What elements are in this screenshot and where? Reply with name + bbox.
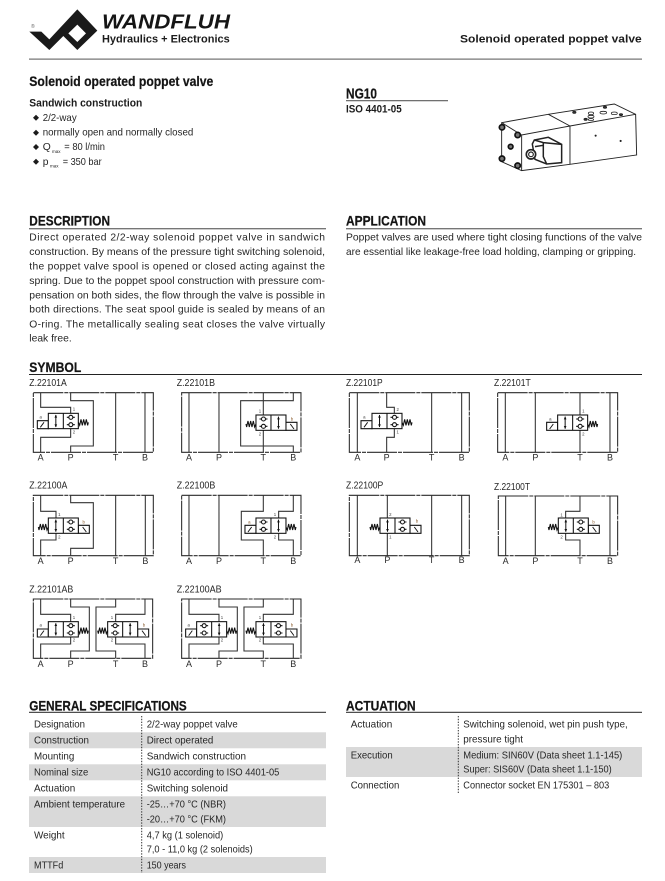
schematic: Z.22101P: T [429,453,435,463]
schematic: Z.22100T: T [577,556,583,566]
illustration: valve body [499,104,637,171]
schematic: Z.22100B: P [216,556,222,566]
schematic: Z.22101T: T [577,453,583,463]
symbol labels [29,378,531,596]
specification names [34,720,125,872]
schematic: Z.22101A: T [113,453,119,463]
symbol labels: Z.22101B [177,378,215,389]
schematic: Z.22100B: a [248,519,251,524]
schematic: Z.22101T: B [607,453,613,463]
description text [29,233,326,345]
schematic: Z.22100AB: B [290,659,296,669]
schematic: Z.22101T: A [502,453,508,463]
schematic: Z.22101P: a [363,415,366,420]
schematic: Z.22101B: 1 [259,409,262,414]
schematic: Z.22100A: B [142,556,148,566]
actuation names: Execution [351,750,393,761]
description text: Direct operated 2/2-way solenoid poppet valve in sandwich [29,233,325,244]
schematic: Z.22101A: B [142,453,148,463]
feature: flow rate: Q [43,142,51,153]
symbol labels: Z.22100B [177,481,215,492]
schematic: Z.22101A: a [39,415,42,420]
specification values: Switching solenoid [147,784,228,795]
schematic: Z.22101AB: B [142,659,148,669]
description text: both directions. The seat spool guide is sealed by means of an [29,305,325,316]
schematic: Z.22100AB: a [187,623,190,628]
schematic: Z.22101B: b [291,416,294,421]
schematic: Z.22100T [498,496,618,566]
schematic: Z.22101P [349,393,469,463]
schematic: Z.22100A [33,495,153,566]
actuation heading: ACTUATION [346,698,416,714]
schematic: Z.22100T: 1 [560,512,563,517]
schematic: Z.22101B: T [261,453,267,463]
application text: Poppet valves are used where tight closing functions of the valve [346,233,642,244]
registered mark: ® [31,23,35,30]
nominal size [346,86,448,116]
schematic: Z.22100B: A [186,556,192,566]
schematic: Z.22101B: A [186,453,192,463]
specification names: Mounting [34,752,75,763]
schematic: Z.22101P: A [354,453,360,463]
specification values: NG10 according to ISO 4401-05 [147,768,280,779]
specification values: Sandwich construction [147,752,246,763]
schematic: Z.22101T: 2 [582,431,585,436]
actuation values: Switching solenoid, wet pin push type, [463,720,628,731]
specification names: MTTFd [34,861,64,872]
schematic: Z.22101A: P [68,453,74,463]
description text: construction. By means of the pressure tight switching solenoid, [29,247,325,258]
specification values: -25…+70 °C (NBR) [147,800,226,811]
schematic: Z.22100AB: 2 [259,638,262,643]
specification names: Actuation [34,784,76,795]
feature: pressure [43,157,102,168]
schematic: Z.22101AB: A [38,659,44,669]
specification values: 2/2-way poppet valve [147,720,238,731]
schematic: Z.22101P: P [384,453,390,463]
symbol labels: Z.22100A [29,481,67,492]
panel: application [346,213,642,258]
feature: flow rate: max [52,149,61,154]
schematic: Z.22100T: P [532,556,538,566]
schematic: Z.22101AB: T [113,659,119,669]
specification names: Construction [34,736,89,747]
schematic: Z.22100A: P [68,556,74,566]
schematic: Z.22101A: 2 [73,429,76,434]
description text: O-ring. The metallically sealing seat closes the valve virtually [29,319,326,330]
schematic: Z.22100AB: 1 [259,615,262,620]
schematic: Z.22100AB: A [186,659,192,669]
logo: Wandfluh [29,9,231,50]
schematic: Z.22101AB: a [39,623,42,628]
schematic: Z.22100P [349,495,469,565]
schematic: Z.22101T [498,393,618,463]
symbol labels: Z.22101P [346,378,383,389]
schematic: Z.22101T: a [549,417,552,422]
application text [346,233,642,258]
feature subheading: Sandwich construction [29,98,143,110]
schematic: Z.22100P: T [429,555,435,565]
schematic: Z.22101AB: 2 [111,638,114,643]
schematic: Z.22100AB [182,599,301,669]
feature: 2/2-way: 2/2-way [43,113,77,124]
feature: flow rate: = 80 l/min [64,142,105,153]
actuation shading [346,747,642,777]
actuation names: Actuation [351,720,393,731]
feature: pressure: max [50,164,59,168]
product heading: Solenoid operated poppet valve [29,73,213,89]
panel: actuation [346,698,642,793]
schematic: Z.22101AB: 1 [111,615,114,620]
schematic: Z.22100P: 2 [389,512,392,517]
description text: spring. Due to the poppet spool construction with pressure com- [29,276,325,287]
feature: pressure: = 350 bar [63,157,102,168]
schematic: Z.22101P: B [459,453,465,463]
schematic: Z.22100AB: P [216,659,222,669]
schematic: Z.22100A: 2 [58,534,61,539]
schematic: Z.22100T: 2 [560,535,563,540]
symbol labels: Z.22101A [29,378,67,389]
schematic: Z.22101AB: 2 [73,638,76,643]
symbol labels: Z.22100P [346,480,383,491]
symbol labels: Z.22101AB [29,585,73,596]
actuation values: Connector socket EN 175301 – 803 [463,781,610,792]
icon: Wandfluh mark [29,9,97,50]
specification names: Nominal size [34,768,89,779]
actuation values: pressure tight [463,735,523,746]
schematic: Z.22100B: 1 [274,512,277,517]
schematic: Z.22101P: 1 [396,429,399,434]
schematic: Z.22101B: P [216,453,222,463]
feature list [29,98,194,168]
schematic: Z.22100A: T [113,556,119,566]
schematic: Z.22101P: 2 [396,407,399,412]
schematic: Z.22101AB: 1 [73,615,76,620]
schematic: Z.22100B [182,495,301,566]
schematic: Z.22100B: 2 [274,534,277,539]
schematic: Z.22100P: b [416,519,419,524]
actuation names: Connection [351,781,400,792]
symbol labels: Z.22100AB [177,585,222,596]
schematic: Z.22100AB: 2 [221,638,224,643]
page header title: Solenoid operated poppet valve [460,33,642,45]
description text: the poppet valve spool is opened or closed acting against the [29,262,325,273]
specification values [147,720,280,872]
description text: leak free. [29,334,72,345]
schematic: Z.22101AB: P [68,659,74,669]
schematic: Z.22100T: A [503,556,509,566]
schematic: Z.22100B: B [290,556,296,566]
size heading: NG10 [346,86,377,102]
specification names: Weight [34,831,65,842]
logo tagline: Hydraulics + Electronics [102,33,230,45]
schematic: Z.22100T: b [592,519,595,524]
schematic: Z.22100AB: 1 [221,615,224,620]
table shading [29,732,326,873]
feature: normally open and closed: normally open and normally closed [43,128,194,139]
logo wordmark: WANDFLUH [102,11,231,33]
schematic: Z.22101A [33,393,153,463]
schematic: Z.22101B: B [290,453,296,463]
schematic: Z.22100P: A [354,555,360,565]
feature bullets [33,115,39,165]
schematic: Z.22100P: 1 [389,534,392,539]
schematic: Z.22101T: 1 [582,409,585,414]
schematic: Z.22101AB: b [143,623,146,628]
schematic: Z.22100A: 1 [58,512,61,517]
schematic: Z.22101A: A [38,453,44,463]
panel: description [29,213,326,345]
feature: pressure: p [43,157,49,168]
panel: general specifications [29,698,326,873]
description text: pensation on both sides, the flow through the valve is possible in [29,290,325,301]
schematic: Z.22100A: b [82,519,85,524]
schematic: Z.22101B [182,393,301,463]
standard: ISO 4401-05 [346,104,402,116]
specification values: Direct operated [147,736,214,747]
symbol heading: SYMBOL [29,359,82,375]
specification values: 4,7 kg (1 solenoid) [147,831,223,842]
symbol labels: Z.22101T [494,378,531,389]
feature: flow rate [43,142,105,154]
schematic: Z.22100T: B [607,556,613,566]
schematic: Z.22101AB [33,599,153,669]
specification names: Designation [34,720,85,731]
general specifications heading: GENERAL SPECIFICATIONS [29,698,187,714]
specification names: Ambient temperature [34,800,125,811]
application text: are essential like leakage-free load holding, clamping or gripping. [346,247,636,258]
schematic: Z.22100A: A [38,556,44,566]
schematic: Z.22101A: 1 [73,407,76,412]
application heading: APPLICATION [346,213,426,229]
schematic: Z.22101B: 2 [259,431,262,436]
actuation values [463,720,628,792]
description heading: DESCRIPTION [29,213,110,229]
symbol labels: Z.22100T [494,482,531,493]
schematic: Z.22100AB: b [291,623,294,628]
actuation values: Medium: SIN60V (Data sheet 1.1-145) [463,750,622,761]
schematic: Z.22101T: P [532,453,538,463]
schematic: Z.22100AB: T [261,659,267,669]
schematic: Z.22100P: B [459,555,465,565]
actuation names [351,720,400,792]
schematic: Z.22100P: P [384,555,390,565]
actuation values: Super: SIS60V (Data sheet 1.1-150) [463,765,612,776]
schematic: Z.22100B: T [261,556,267,566]
specification values: -20…+70 °C (FKM) [147,815,226,826]
specification values: 7,0 - 11,0 kg (2 solenoids) [147,845,253,856]
specification values: 150 years [147,861,186,872]
